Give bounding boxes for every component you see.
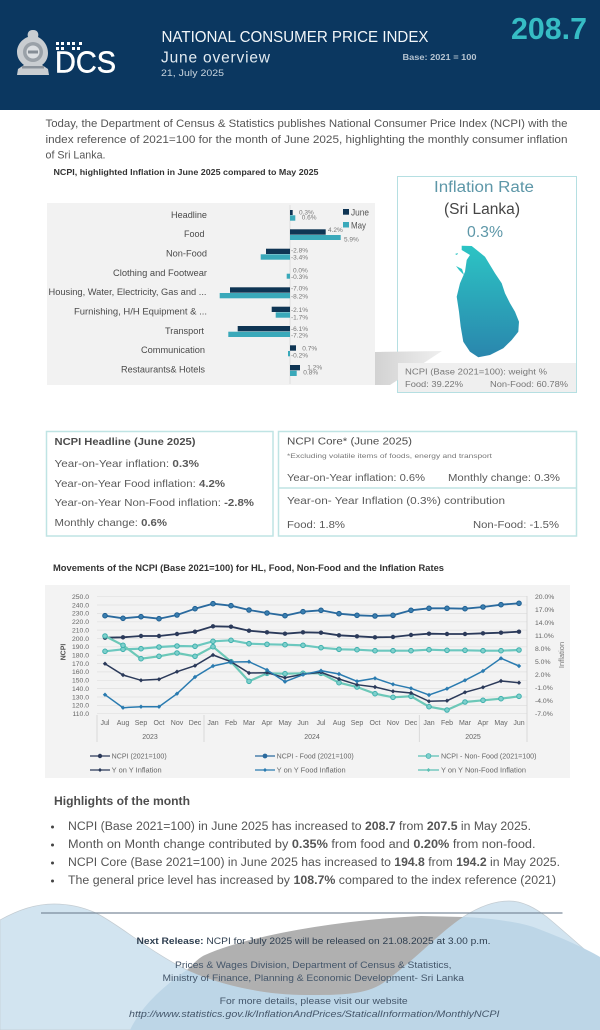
right axis labels: -7.0% xyxy=(535,711,553,718)
month labels: Oct xyxy=(154,720,164,727)
panel: NCPI headline xyxy=(46,432,273,536)
value labels xyxy=(291,209,359,376)
left axis labels: 220.0 xyxy=(72,619,89,626)
month labels: Jul xyxy=(101,720,110,727)
month labels: Sep xyxy=(135,720,147,727)
left axis labels: 140.0 xyxy=(72,686,89,693)
chart shadow wedge xyxy=(375,351,442,385)
right axis labels: 2.0% xyxy=(535,672,550,679)
line chart legend: Y on Y Inflation xyxy=(112,768,162,774)
left axis labels: 180.0 xyxy=(72,652,89,660)
division credit: Ministry of Finance, Planning & Economic Development- Sri Lanka xyxy=(162,973,465,984)
month labels: Aug xyxy=(117,720,129,727)
bar chart heading: NCPI, highlighted Inflation in June 2025 compared to May 2025 xyxy=(54,167,319,177)
logo: DCS: DCS xyxy=(55,44,116,80)
value labels: 0.7% xyxy=(302,346,317,352)
value labels: -6.1% xyxy=(291,326,308,333)
month labels: Apr xyxy=(262,720,273,727)
series: NCPI xyxy=(105,626,519,638)
month labels: May xyxy=(494,720,508,727)
month labels: Jun xyxy=(297,720,309,727)
category labels: Transport xyxy=(165,326,205,336)
month labels: Aug xyxy=(333,720,345,727)
panel: NCPI core: NCPI Core* (June 2025) xyxy=(287,436,412,448)
left axis labels: 160.0 xyxy=(72,669,89,676)
value labels: -7.0% xyxy=(291,286,308,292)
month labels: Sep xyxy=(351,720,363,727)
weight band: Non-Food: 60.78% xyxy=(490,380,568,389)
month labels: 2024 xyxy=(304,734,320,741)
bar legend xyxy=(343,208,369,230)
value labels: 4.2% xyxy=(328,227,343,234)
left axis labels: 240.0 xyxy=(72,602,89,609)
value labels: 0.0% xyxy=(293,268,308,274)
category labels xyxy=(48,210,207,374)
category labels: Communication xyxy=(141,345,205,355)
inflation rate value: 0.3% xyxy=(467,224,503,241)
header title: NATIONAL CONSUMER PRICE INDEX xyxy=(162,29,429,46)
right axis labels: 17.0% xyxy=(535,607,554,614)
left axis labels: 210.0 xyxy=(72,627,89,634)
value labels: -1.7% xyxy=(291,314,308,322)
division credit xyxy=(162,960,465,984)
weight band xyxy=(398,363,576,392)
intro text: index reference of 2021=100 for the month of June 2025, highlighting the monthly consumer inflation xyxy=(46,134,568,146)
left axis labels: 130.0 xyxy=(72,694,89,701)
line chart legend: NCPI - Non- Food (2021=100) xyxy=(441,754,536,760)
month labels: Jul xyxy=(317,720,326,727)
right axis labels: 20.0% xyxy=(535,594,554,601)
panel: NCPI core xyxy=(278,432,576,536)
value labels: 5.9% xyxy=(344,236,359,244)
panel: NCPI core: *Excluding volatile items of foods, energy and transport xyxy=(287,454,492,460)
right axis labels xyxy=(535,594,554,718)
series: year on year non-food inflation xyxy=(105,636,519,710)
intro text: Today, the Department of Census & Statistics publishes National Consumer Price Index (NCPI) with the xyxy=(46,118,568,130)
value labels: -0.2% xyxy=(291,352,308,360)
left axis labels: 200.0 xyxy=(72,636,89,643)
line chart heading: Movements of the NCPI (Base 2021=100) for HL, Food, Non-Food and the Inflation Rates xyxy=(53,563,444,573)
series: NCPI non-food xyxy=(105,640,519,651)
series: year on year inflation xyxy=(105,655,519,701)
line chart legend: NCPI - Food (2021=100) xyxy=(277,754,354,760)
month labels: Mar xyxy=(243,720,256,727)
left axis labels: 250.0 xyxy=(72,594,89,601)
left axis labels: 110.0 xyxy=(72,711,89,718)
website details xyxy=(129,996,500,1020)
value labels: -0.3% xyxy=(291,274,308,281)
month labels: Mar xyxy=(459,720,472,727)
next release notice: Next Release: NCPI for July 2025 will be released on 21.08.2025 at 3.00 p.m. xyxy=(136,936,490,947)
value labels: -8.2% xyxy=(291,294,308,300)
month labels: Nov xyxy=(387,720,400,727)
map of Sri Lanka xyxy=(455,246,519,357)
line chart legend xyxy=(90,754,536,774)
left axis labels: 170.0 xyxy=(72,661,89,668)
panel: NCPI core: Year-on- Year Inflation (0.3%) contribution xyxy=(287,495,505,507)
line chart legend: NCPI (2021=100) xyxy=(112,754,167,760)
bar chart xyxy=(47,203,375,385)
website details: http://www.statistics.gov.lk/InflationAndPrices/StaticalInformation/MonthlyNCPI xyxy=(129,1009,500,1020)
header date: 21, July 2025 xyxy=(161,68,224,79)
highlights list xyxy=(51,821,560,887)
base note: Base: 2021 = 100 xyxy=(402,53,477,62)
value labels: -2.8% xyxy=(291,248,308,254)
left axis labels: 230.0 xyxy=(72,611,89,618)
series: NCPI food xyxy=(105,603,519,619)
month labels: Oct xyxy=(370,720,380,727)
line chart xyxy=(45,585,570,778)
footer text xyxy=(129,936,500,1020)
category labels: Non-Food xyxy=(166,248,207,258)
line chart legend: Y on Y Food Inflation xyxy=(277,768,346,774)
bar legend: June xyxy=(351,208,369,218)
value labels: 0.3% xyxy=(299,209,314,216)
right axis labels: -1.0% xyxy=(535,685,553,692)
month labels: Dec xyxy=(405,720,418,727)
value labels: 1.2% xyxy=(307,364,322,372)
right axis labels: -4.0% xyxy=(535,698,553,705)
right axis labels: 5.0% xyxy=(535,659,550,666)
category labels: Food xyxy=(184,229,205,239)
footer background waves xyxy=(0,901,600,1030)
line chart legend: Y on Y Non-Food Inflation xyxy=(441,768,526,774)
month labels: Dec xyxy=(189,720,202,727)
panel: NCPI headline: Monthly change: 0.6% xyxy=(54,517,168,529)
website details: For more details, please visit our website xyxy=(220,996,408,1007)
month labels: Nov xyxy=(171,720,184,727)
series: year on year food inflation xyxy=(105,658,519,708)
panel: NCPI headline: NCPI Headline (June 2025) xyxy=(54,437,196,448)
month labels: 2025 xyxy=(465,734,481,741)
month labels: 2023 xyxy=(142,734,158,741)
panel: NCPI headline: Year-on-Year Non-Food inflation: -2.8% xyxy=(54,497,255,509)
headline index value: 208.7 xyxy=(511,11,587,46)
month labels: Apr xyxy=(478,720,489,727)
panel: NCPI core: Food: 1.8% xyxy=(287,519,345,531)
June bars xyxy=(230,210,326,370)
month labels xyxy=(101,720,525,741)
highlights heading: Highlights of the month xyxy=(54,796,190,808)
right axis labels: 14.0% xyxy=(535,620,554,627)
value labels: -7.2% xyxy=(291,332,308,340)
month labels: Feb xyxy=(441,720,453,727)
panel: NCPI core: Year-on-Year inflation: 0.6% xyxy=(287,472,425,484)
header banner xyxy=(0,0,600,110)
highlights list: NCPI Core (Base 2021=100) in June 2025 has increased to 194.8 from 194.2 in May 2025. xyxy=(68,857,560,869)
division credit: Prices & Wages Division, Department of Census & Statistics, xyxy=(175,960,452,971)
header subtitle: June overview xyxy=(161,50,271,66)
icon: national emblem xyxy=(17,30,49,75)
category labels: Restaurants& Hotels xyxy=(121,364,206,374)
category labels: Headline xyxy=(171,210,207,220)
intro text xyxy=(46,118,568,162)
month labels: Jun xyxy=(513,720,525,727)
May bars xyxy=(220,215,341,376)
country label: (Sri Lanka) xyxy=(444,201,520,218)
weight band: Food: 39.22% xyxy=(405,380,463,389)
left axis title: NCPI xyxy=(60,644,68,660)
highlights list: NCPI (Base 2021=100) in June 2025 has increased to 208.7 from 207.5 in May 2025. xyxy=(68,821,531,833)
left axis labels: 190.0 xyxy=(72,644,89,651)
value labels: 0.8% xyxy=(303,370,318,376)
highlights list: Month on Month change contributed by 0.35% from food and 0.20% from non-food. xyxy=(68,839,536,851)
right axis labels: 8.0% xyxy=(535,646,550,653)
weight band: NCPI (Base 2021=100): weight % xyxy=(405,368,547,376)
right axis title: Inflation xyxy=(557,642,566,668)
category labels: Furnishing, H/H Equipment & ... xyxy=(74,306,207,316)
left axis labels: 150.0 xyxy=(72,678,89,685)
value labels: -2.1% xyxy=(291,307,308,314)
bar legend: May xyxy=(351,220,366,230)
left axis labels xyxy=(72,594,89,718)
value labels: 0.6% xyxy=(302,215,317,222)
panel: NCPI core: Monthly change: 0.3% xyxy=(448,472,560,484)
month labels: May xyxy=(278,720,292,727)
panel: NCPI headline: Year-on-Year inflation: 0.3% xyxy=(54,458,200,470)
inflation rate label: Inflation Rate xyxy=(434,179,534,196)
panel: inflation rate map xyxy=(375,176,576,392)
month labels: Feb xyxy=(225,720,237,727)
category labels: Housing, Water, Electricity, Gas and ... xyxy=(48,287,206,297)
right axis labels: 11.0% xyxy=(535,633,554,640)
month labels: Jan xyxy=(207,720,219,727)
intro text: of Sri Lanka. xyxy=(46,150,106,162)
category labels: Clothing and Footwear xyxy=(113,268,207,278)
month labels: Jan xyxy=(423,720,435,727)
left axis labels: 120.0 xyxy=(72,703,89,710)
value labels: -3.4% xyxy=(291,254,308,262)
panel: NCPI headline: Year-on-Year Food inflation: 4.2% xyxy=(54,478,226,490)
panel: NCPI core: Non-Food: -1.5% xyxy=(473,519,559,531)
highlights list: The general price level has increased by 108.7% compared to the index reference (2021) xyxy=(68,875,556,887)
